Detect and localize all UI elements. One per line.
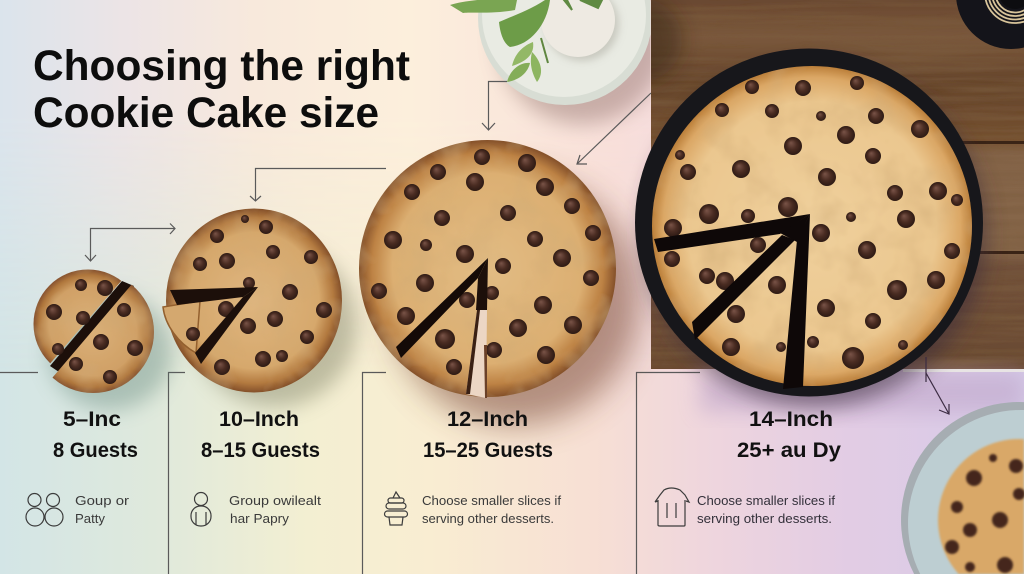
chocolate chips: [186, 215, 332, 375]
icon: apron: [655, 488, 689, 526]
cut gaps: [396, 258, 488, 398]
purple band below table: [700, 369, 1024, 412]
note text: Patty: [75, 511, 106, 526]
note text: [697, 493, 835, 526]
heading: 5-inch: 5–Inc: [63, 408, 121, 431]
arrow: to 10-inch: [250, 168, 386, 201]
chocolate chips: [664, 76, 963, 369]
heading: 5-inch: [53, 408, 138, 462]
black pan: [635, 48, 983, 396]
cut-out slice: [163, 301, 200, 353]
title: Cookie Cake size: [33, 89, 379, 137]
arrow: to 14-inch: [577, 93, 651, 164]
column: 10-inch: [191, 408, 321, 526]
icon: green leaves: [450, 0, 602, 82]
heading: 14-inch: 14–Inch: [749, 408, 833, 431]
note text: Goup or: [75, 493, 130, 508]
note text: Choose smaller slices if: [422, 493, 561, 508]
heading: 12-inch: 15–25 Guests: [423, 439, 553, 462]
section bracket lines: [0, 372, 700, 574]
plate with cookie, lower right: [901, 402, 1024, 574]
arrow: to 12-inch: [482, 82, 507, 130]
arrow: to plate at lower right: [926, 357, 949, 414]
cookie: 5-inch: [32, 270, 172, 410]
cookie: 12-inch: [359, 140, 640, 425]
column: 14-inch: [655, 408, 841, 526]
column: 12-inch: [384, 408, 561, 526]
heading: 5-inch: 8 Guests: [53, 439, 138, 462]
note text: har Papry: [230, 511, 290, 526]
column: 5-inch: [26, 408, 138, 526]
title: Choosing the right: [33, 42, 410, 90]
wooden table: [651, 0, 1024, 369]
heading: 10-inch: 8–15 Guests: [201, 439, 320, 462]
heading: 10-inch: 10–Inch: [219, 408, 299, 431]
cookie: 14-inch on black pan: [635, 48, 987, 407]
icon: person: [191, 492, 211, 526]
note text: serving other desserts.: [697, 511, 832, 526]
chocolate chips: [371, 149, 601, 375]
cut gaps: [654, 214, 810, 389]
coffee cup on black saucer: [956, 0, 1024, 49]
note text: serving other desserts.: [422, 511, 554, 526]
note text: Group owilealt: [229, 493, 321, 508]
heading: 12-inch: [423, 408, 553, 462]
icon: two people: [26, 494, 63, 526]
heading: 14-inch: [737, 408, 841, 462]
cookie: 10-inch: [163, 208, 357, 407]
cut gaps: [170, 287, 258, 364]
note text: [75, 493, 130, 526]
note text: [422, 493, 561, 526]
heading: 14-inch: 25+ au Dy: [737, 439, 841, 462]
chocolate chips: [46, 279, 143, 384]
title: [33, 42, 410, 137]
heading: 10-inch: [201, 408, 320, 462]
icon: layered cake: [384, 492, 408, 525]
arrow: to 5-inch and 10-inch: [85, 224, 175, 261]
note text: Choose smaller slices if: [697, 493, 835, 508]
chocolate chips: [945, 454, 1024, 573]
note text: [229, 493, 321, 526]
heading: 12-inch: 12–Inch: [447, 408, 528, 431]
plate with cup and leaves: [450, 0, 666, 124]
